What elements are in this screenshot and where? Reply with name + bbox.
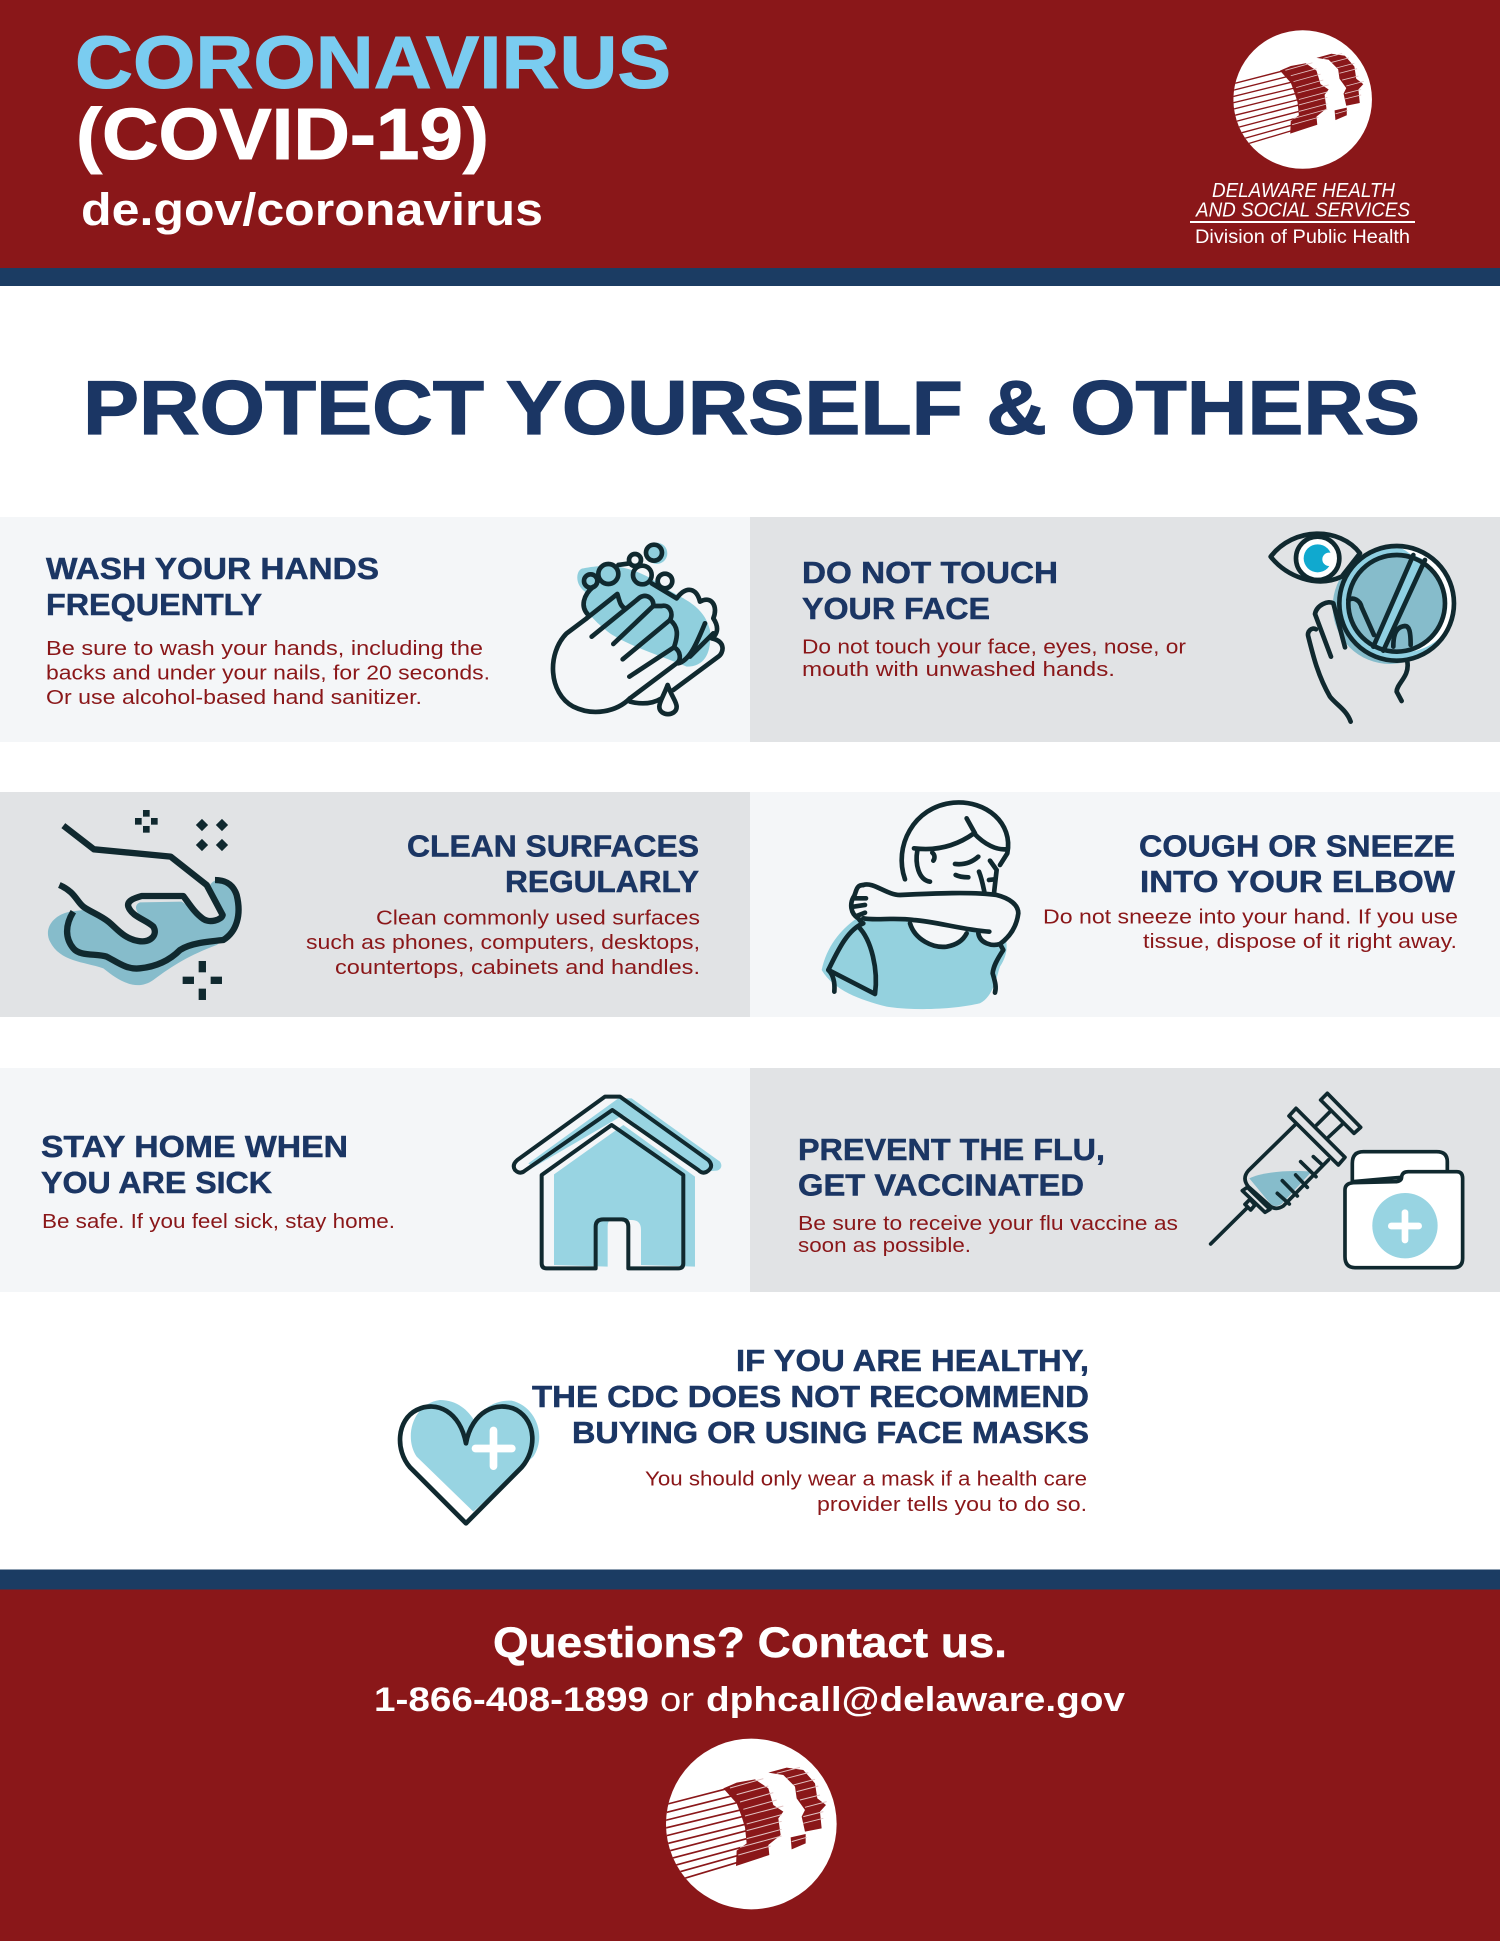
icon: DHSS logo [1229, 30, 1372, 169]
organisation name: AND SOCIAL SERVICES [1195, 200, 1411, 222]
heading: get vaccinated: GET VACCINATED [798, 1168, 1084, 1202]
heading: face masks [532, 1343, 1089, 1450]
icon: washing hands [553, 543, 723, 714]
text: clean surfaces: countertops, cabinets and handles. [335, 956, 700, 979]
icon: heart with plus [400, 1400, 539, 1523]
heading: face masks: BUYING OR USING FACE MASKS [572, 1415, 1089, 1450]
contact details: or [660, 1681, 694, 1719]
text: clean surfaces: such as phones, computers, desktops, [306, 931, 700, 954]
footer band [0, 1589, 1500, 1941]
text: clean surfaces: Clean commonly used surfaces [376, 906, 700, 930]
contact details [374, 1681, 1125, 1719]
title: CORONAVIRUS [75, 21, 671, 104]
heading: touch face [802, 555, 1058, 626]
heading: wash hands [46, 551, 379, 622]
text: cough or sneeze: Do not sneeze into your hand. If you use [1043, 906, 1458, 928]
heading: cough or sneeze: INTO YOUR ELBOW [1140, 864, 1456, 899]
panel: touch face [750, 517, 1500, 742]
text: stay home: Be safe. If you feel sick, stay home. [42, 1210, 395, 1233]
organisation name: Division of Public Health [1195, 226, 1410, 248]
icon: eye and hand [1271, 534, 1454, 722]
text: wash hands: Be sure to wash your hands, including the [46, 637, 483, 660]
text: get vaccinated [798, 1212, 1178, 1257]
text: face masks: You should only wear a mask if a health care [645, 1468, 1087, 1490]
heading: touch face: DO NOT TOUCH [802, 555, 1058, 590]
text: cough or sneeze: tissue, dispose of it right away. [1143, 930, 1457, 953]
text: get vaccinated: Be sure to receive your flu vaccine as [798, 1212, 1178, 1235]
text: touch face [802, 636, 1186, 681]
organisation name [1190, 180, 1415, 248]
text: touch face: mouth with unwashed hands. [802, 658, 1115, 681]
contact details: dphcall@delaware.gov [706, 1681, 1125, 1719]
heading: wash hands: WASH YOUR HANDS [46, 551, 379, 586]
icon: DHSS logo footer [660, 1739, 837, 1909]
panel: face masks [400, 1343, 1089, 1523]
heading: cough or sneeze [1139, 828, 1456, 899]
heading: clean surfaces [407, 828, 699, 899]
heading: face masks: THE CDC DOES NOT RECOMMEND [532, 1379, 1089, 1414]
title [75, 21, 671, 175]
icon: person sneezing into elbow [822, 802, 1018, 1009]
heading: stay home: YOU ARE SICK [41, 1165, 273, 1200]
heading: cough or sneeze: COUGH OR SNEEZE [1139, 828, 1455, 864]
panel: cough or sneeze [750, 792, 1500, 1017]
text: touch face: Do not touch your face, eyes, nose, or [802, 636, 1186, 658]
title: (COVID-19) [76, 95, 489, 175]
website link: de.gov/coronavirus [81, 184, 543, 235]
heading: face masks: IF YOU ARE HEALTHY, [736, 1343, 1089, 1378]
text: wash hands: Or use alcohol-based hand sanitizer. [46, 686, 422, 709]
panel: clean surfaces [0, 792, 750, 1017]
text: face masks [645, 1468, 1087, 1516]
organisation name: DELAWARE HEALTH [1212, 180, 1396, 202]
icon: syringe and medical folder [1211, 1093, 1463, 1268]
header band [0, 0, 1500, 268]
text: wash hands [46, 637, 490, 709]
text: cough or sneeze [1043, 906, 1458, 953]
panel: stay home [0, 1068, 750, 1292]
text: wash hands: backs and under your nails, for 20 seconds. [46, 662, 490, 684]
heading: get vaccinated [798, 1132, 1105, 1202]
heading: wash hands: FREQUENTLY [46, 587, 262, 622]
heading: stay home: STAY HOME WHEN [41, 1129, 348, 1164]
panel: wash hands [0, 517, 750, 742]
footer heading: Questions? Contact us. [493, 1619, 1007, 1667]
contact details: 1-866-408-1899 [374, 1681, 649, 1719]
heading: get vaccinated: PREVENT THE FLU, [798, 1132, 1105, 1167]
heading: clean surfaces: REGULARLY [505, 864, 699, 899]
heading: stay home [41, 1129, 348, 1200]
icon: cleaning cloth [48, 810, 240, 1000]
text: get vaccinated: soon as possible. [798, 1234, 971, 1257]
heading: clean surfaces: CLEAN SURFACES [407, 828, 699, 864]
main heading: PROTECT YOURSELF & OTHERS [83, 366, 1420, 451]
panel: get vaccinated [750, 1068, 1500, 1292]
text: clean surfaces [306, 906, 700, 979]
heading: touch face: YOUR FACE [802, 591, 990, 626]
text: face masks: provider tells you to do so. [817, 1493, 1087, 1516]
icon: house [514, 1097, 721, 1268]
